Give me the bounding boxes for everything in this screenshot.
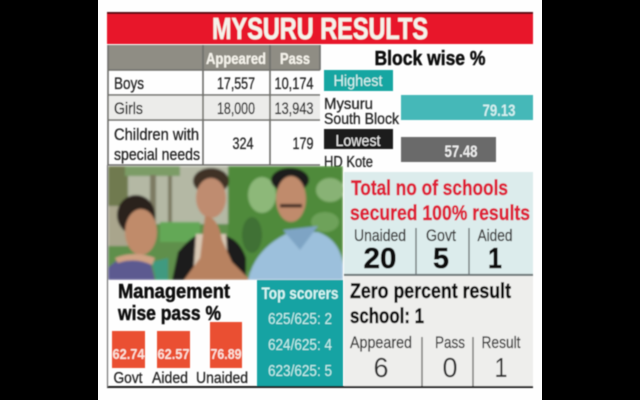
panel: schools with 100% results: Aided xyxy=(478,227,512,245)
management wise pass panel: Management xyxy=(118,281,230,303)
results table: Appeared xyxy=(206,51,266,68)
top scorers panel: Top scorers xyxy=(262,284,338,303)
highest block: Highest xyxy=(334,73,383,90)
panel: zero percent result: 6 xyxy=(374,352,388,383)
bar: unaided xyxy=(196,322,248,387)
panel: zero percent result: school: 1 xyxy=(350,304,424,328)
panel: schools with 100% results: 20 xyxy=(364,243,396,275)
woman xyxy=(117,195,155,235)
management wise pass panel: wise pass % xyxy=(117,303,221,325)
bar: govt: Govt xyxy=(114,370,143,387)
panel: schools with 100% results: Govt xyxy=(426,227,456,245)
results table: 17,557 xyxy=(217,75,255,93)
panel: schools with 100% results xyxy=(344,172,533,275)
top scorers panel xyxy=(257,280,343,386)
results table: Girls xyxy=(114,100,143,118)
results table: 179 xyxy=(292,135,314,153)
highest block: South Block xyxy=(324,111,400,128)
bar: govt: 62.74 xyxy=(112,346,145,363)
highest block: 79.13 xyxy=(482,102,516,120)
results table: 13,943 xyxy=(274,100,314,118)
highest block: Mysuru xyxy=(324,96,373,113)
lowest block: HD Kote xyxy=(324,154,373,171)
bar: aided xyxy=(152,331,190,387)
results table: special needs xyxy=(114,146,200,164)
top scorers panel: 624/625: 4 xyxy=(268,337,332,354)
bar: govt xyxy=(112,331,145,387)
top scorers panel: 623/625: 5 xyxy=(268,363,332,380)
panel: zero percent result: Zero percent result xyxy=(350,279,511,303)
panel: schools with 100% results: secured 100% results xyxy=(350,201,530,225)
results table: 18,000 xyxy=(217,100,255,118)
results table: 324 xyxy=(232,135,254,153)
panel: zero percent result: Result xyxy=(482,334,521,352)
photo: family of top scorer xyxy=(108,166,344,280)
boy xyxy=(172,236,246,280)
bar: aided: Aided xyxy=(152,370,188,387)
management wise pass panel xyxy=(112,281,248,387)
panel: schools with 100% results: 1 xyxy=(488,243,502,275)
man xyxy=(248,232,343,280)
lowest block xyxy=(324,129,496,171)
results table: Pass xyxy=(280,51,310,68)
results table: Boys xyxy=(114,75,144,93)
results table xyxy=(108,45,320,165)
panel: zero percent result: Appeared xyxy=(350,334,412,352)
results table: Children with xyxy=(114,126,199,144)
title banner: MYSURU RESULTS xyxy=(212,11,428,46)
block wise heading: Block wise % xyxy=(374,48,486,70)
title banner xyxy=(107,11,533,46)
panel: schools with 100% results: Total no of schools xyxy=(351,176,508,200)
lowest block: 57.48 xyxy=(444,143,478,161)
panel: schools with 100% results: 5 xyxy=(433,243,449,275)
panel: schools with 100% results: Unaided xyxy=(354,227,406,245)
bar: unaided: Unaided xyxy=(196,370,248,387)
bar: aided: 62.57 xyxy=(158,346,190,363)
results table: 10,174 xyxy=(274,75,314,93)
panel: zero percent result: 1 xyxy=(494,352,508,383)
bar: unaided: 76.89 xyxy=(210,346,242,363)
lowest block: Lowest xyxy=(336,133,381,150)
panel: zero percent result xyxy=(344,276,533,386)
panel: zero percent result: Pass xyxy=(435,334,465,352)
panel: zero percent result: 0 xyxy=(442,352,458,383)
top scorers panel: 625/625: 2 xyxy=(268,311,332,328)
highest block xyxy=(324,70,533,128)
